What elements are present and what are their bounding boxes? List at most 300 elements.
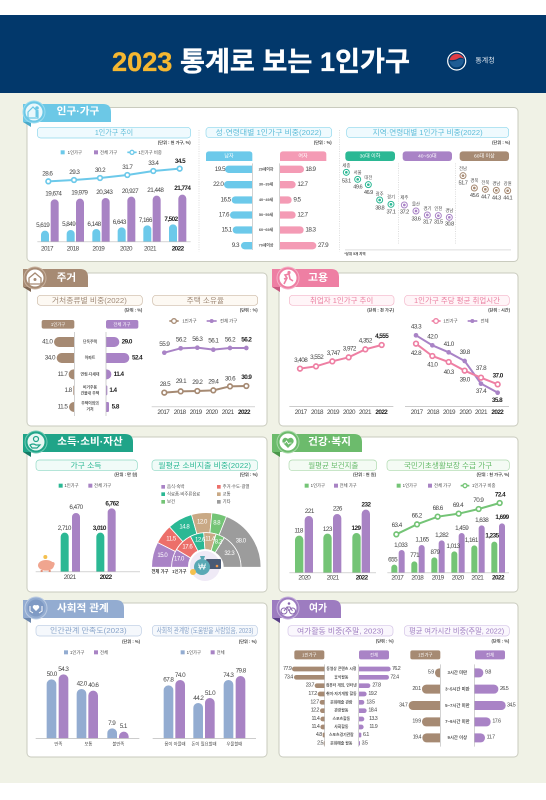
title: 2023 통계로 보는 1인가구 <box>112 47 410 77</box>
icon: piggy bank <box>38 555 55 572</box>
chart: 국민기초생활보장 수급 가구: 1,699 <box>495 514 510 521</box>
chart: 월평균 소비지출 비중: 주거·수도·광열 <box>223 483 249 490</box>
chart: 성·연령대별 1인가구 비중 <box>199 127 332 252</box>
chart: 인간관계 만족도: 7.9 <box>108 720 116 727</box>
chart: 1인가구 추이: 28.6 <box>42 170 53 177</box>
section tab: 인구·가구 <box>23 101 111 127</box>
chart: 사회적 관계망: 74.0 <box>175 672 186 679</box>
chart: 월평균 소비지출 비중: 교통 <box>223 491 231 496</box>
chart: 거처종류별 비중 <box>37 295 143 416</box>
chart: 성·연령대별 1인가구 비중: 남자 <box>224 152 234 159</box>
chart: 거처종류별 비중: 1.4 <box>109 387 118 394</box>
chart: 성·연령대별 1인가구 비중: 19.5 <box>215 166 226 173</box>
chart: 주택 소유율: 2017 <box>157 409 170 416</box>
chart: 여가활동 비중: 12.2 <box>311 708 320 714</box>
chart: 평균 여가시간 비중: 1인가구 <box>418 651 433 658</box>
chart: 가구 소득: 6,470 <box>69 504 84 511</box>
chart: 1인가구 주당 평균 취업시간: 39.0 <box>460 376 471 383</box>
chart: 여가활동 비중: 동영상 콘텐츠 시청 <box>326 666 357 671</box>
chart: 1인가구 추이: 2021 <box>144 245 157 252</box>
chart: 여가활동 비중: 77.9 <box>283 666 292 672</box>
chart: 월평균 보건지출: 2022 <box>356 574 369 581</box>
chart: 국민기초생활보장 수급 가구: 1,235 <box>485 532 500 539</box>
chart: 국민기초생활보장 수급 가구: 1,165 <box>415 536 430 543</box>
chart: 주택 소유율: 30.9 <box>241 374 252 381</box>
chart: 국민기초생활보장 수급 가구: 63.4 <box>392 522 403 529</box>
chart: 평균 여가시간 비중: 평균 여가시간 비중(주말, 2022) <box>409 626 504 635</box>
chart: 주택 소유율: 2022 <box>238 409 251 416</box>
section tab: 소득·소비·자산: 소득·소비·자산 <box>57 435 123 448</box>
chart: 월평균 보건지출: 2020 <box>298 574 311 581</box>
chart: 월평균 소비지출 비중: 15.0 <box>157 553 168 559</box>
chart: 사회적 관계망: 몸이 아플때 <box>164 740 186 747</box>
chart: 월평균 소비지출 비중: 기타 <box>223 498 231 505</box>
chart: 인간관계 만족도 <box>36 625 141 747</box>
chart: 평균 여가시간 비중: 5.9 <box>428 670 434 676</box>
chart: 성·연령대별 1인가구 비중: 22.0 <box>213 181 224 188</box>
chart: 주택 소유율: 56.3 <box>192 336 203 343</box>
chart: 평균 여가시간 비중: 34.5 <box>507 702 516 708</box>
chart: 취업자 1인가구 추이: (단위 : 천 가구) <box>367 306 395 312</box>
chart: 지역·연령대별 1인가구 비중: 경남 <box>492 180 500 186</box>
chart: 성·연령대별 1인가구 비중: 17.6 <box>219 211 230 218</box>
chart: 주택 소유율: 2018 <box>174 409 187 416</box>
chart: 평균 여가시간 비중: 전체 <box>486 651 494 658</box>
chart: 성·연령대별 1인가구 비중: 9.3 <box>232 242 240 249</box>
chart: 가구 소득: 가구 소득 <box>70 461 102 470</box>
chart: 국민기초생활보장 수급 가구: 2020 <box>452 574 465 581</box>
icon: statistics korea logo: 통계청 <box>475 56 495 64</box>
chart: 1인가구 주당 평균 취업시간: 42.8 <box>411 350 422 357</box>
chart: 여가활동 비중: 19.2 <box>368 691 377 697</box>
chart: 평균 여가시간 비중: 17.6 <box>492 719 501 725</box>
chart: 지역·연령대별 1인가구 비중: 30대 이하 <box>360 152 381 159</box>
chart: 월평균 보건지출: (단위 : 천 원) <box>353 471 377 477</box>
chart: 여가활동 비중: 스포츠활동 <box>333 716 351 721</box>
chart: 취업자 1인가구 추이: 3,972 <box>343 345 357 352</box>
panel: 고용 <box>272 267 518 426</box>
chart: 성·연령대별 1인가구 비중: 30~39세 <box>259 182 274 187</box>
chart: 주택 소유율: (단위 : %) <box>240 306 258 312</box>
chart: 가구 소득 <box>36 460 140 581</box>
chart: 인간관계 만족도: 5.1 <box>120 723 128 730</box>
chart: 인간관계 만족도: 불만족 <box>112 740 124 747</box>
chart: 1인가구 주당 평균 취업시간: 2020 <box>459 409 472 416</box>
chart: 인간관계 만족도: 만족 <box>54 740 62 747</box>
chart: 월평균 소비지출 비중: 보건 <box>167 498 175 504</box>
chart: 가구 소득: 2022 <box>100 574 113 581</box>
chart: 가구 소득: 전체 가구 <box>94 482 111 489</box>
chart: 취업자 1인가구 추이: 2019 <box>327 409 340 416</box>
section tab: 사회적 관계: 사회적 관계 <box>57 602 109 614</box>
chart: 평균 여가시간 비중: 3시간 미만 <box>448 669 467 676</box>
chart: 여가활동 비중: 23.7 <box>306 683 315 689</box>
chart: 여가활동 비중: 11.4 <box>311 724 320 730</box>
chart: 지역·연령대별 1인가구 비중: 전남 <box>459 165 467 171</box>
chart: 가구 소득: 1인가구 <box>64 482 79 489</box>
chart: 지역·연령대별 1인가구 비중: 60대 이상 <box>474 152 495 159</box>
panel: 사회적 관계 <box>23 597 267 757</box>
chart: 성·연령대별 1인가구 비중: 70세이상 <box>259 243 274 248</box>
chart: 월평균 소비지출 비중: 음식·숙박 <box>167 483 184 490</box>
chart: 성·연령대별 1인가구 비중: 27.9 <box>318 242 329 249</box>
chart: 월평균 보건지출: 129 <box>352 525 361 532</box>
chart: 국민기초생활보장 수급 가구: 70.9 <box>473 497 484 504</box>
chart: 평균 여가시간 비중: 5~7시간 미만 <box>445 702 470 709</box>
chart: 성·연령대별 1인가구 비중: 12.7 <box>297 211 309 218</box>
chart: 성·연령대별 1인가구 비중: 60~69세 <box>259 227 274 232</box>
chart: 거처종류별 비중: 34.0 <box>45 354 56 361</box>
chart: 인간관계 만족도: 전체 <box>100 649 108 656</box>
chart: 월평균 소비지출 비중: 14.8 <box>179 524 190 530</box>
chart: 국민기초생활보장 수급 가구: 1,638 <box>475 517 489 524</box>
chart: 지역·연령대별 1인가구 비중: 30.8 <box>445 221 454 227</box>
chart: 여가활동 비중: 12.7 <box>310 699 319 705</box>
chart: 1인가구 추이: 30.2 <box>95 167 106 174</box>
chart: 평균 여가시간 비중: 3~5시간 미만 <box>445 685 470 692</box>
chart: 지역·연령대별 1인가구 비중: 전북 <box>481 179 489 186</box>
chart: 월평균 소비지출 비중: 38.0 <box>236 538 247 544</box>
chart: 월평균 보건지출: 월평균 보건지출 <box>308 461 359 470</box>
chart: 주택 소유율: 28.5 <box>160 381 171 388</box>
chart: 지역·연령대별 1인가구 비중: 광주 <box>376 190 384 197</box>
chart: 1인가구 주당 평균 취업시간: 2022 <box>491 409 504 416</box>
chart: 여가활동 비중: 73.4 <box>284 674 293 680</box>
chart: 주택 소유율: 29.2 <box>192 379 203 386</box>
chart: 지역·연령대별 1인가구 비중: 울산 <box>412 200 420 206</box>
chart: 1인가구 주당 평균 취업시간 <box>405 295 511 416</box>
chart: 주택 소유율 <box>152 295 258 416</box>
icon: money bag and card: ₩ <box>198 562 206 572</box>
section tab: 고용: 고용 <box>308 272 328 284</box>
chart: 여가활동 비중: 2.5 <box>317 740 324 746</box>
chart: 평균 여가시간 비중 <box>399 626 516 748</box>
chart: 월평균 보건지출: 221 <box>305 508 315 515</box>
chart: 성·연령대별 1인가구 비중: 15.1 <box>221 226 233 233</box>
chart: 1인가구 추이: 2017 <box>41 245 54 252</box>
section tab: 여가: 여가 <box>309 602 327 614</box>
chart: 지역·연령대별 1인가구 비중: 경기 <box>423 205 431 212</box>
chart: 여가활동 비중: 72.4 <box>390 674 399 680</box>
chart: 월평균 보건지출: 226 <box>333 505 343 512</box>
chart: 여가활동 비중: 27.8 <box>372 683 381 689</box>
chart: 주택 소유율: 56.1 <box>208 337 219 344</box>
chart: 국민기초생활보장 수급 가구: 1,161 <box>465 537 479 544</box>
chart: 1인가구 추이: 29.3 <box>69 169 80 176</box>
section tab: 주거: 주거 <box>57 271 76 284</box>
section tab: 건강·복지: 건강·복지 <box>308 436 351 448</box>
chart: 국민기초생활보장 수급 가구: 2018 <box>411 574 424 581</box>
chart: 인간관계 만족도: 보통 <box>84 741 92 746</box>
chart: 성·연령대별 1인가구 비중: 29세이하 <box>259 166 274 171</box>
chart: 지역·연령대별 1인가구 비중: 44.7 <box>481 195 490 201</box>
chart: 성·연령대별 1인가구 비중: 12.7 <box>297 181 309 188</box>
chart: 월평균 소비지출 비중: 8.2 <box>215 539 223 545</box>
chart: 국민기초생활보장 수급 가구: 국민기초생활보장 수급 가구 <box>404 461 492 470</box>
chart: 1인가구 주당 평균 취업시간: 37.8 <box>476 365 487 372</box>
chart: 지역·연령대별 1인가구 비중 <box>339 127 512 256</box>
chart: 거처종류별 비중: 전체 가구 <box>113 321 131 328</box>
chart: 국민기초생활보장 수급 가구: 2017 <box>391 574 404 581</box>
section tab: 소득·소비·자산 <box>23 431 133 457</box>
chart: 취업자 1인가구 추이: 3,552 <box>310 354 324 361</box>
chart: 주택 소유율: 전체 가구 <box>220 317 237 324</box>
chart: 사회적 관계망: 44.2 <box>193 695 204 702</box>
chart: 1인가구 주당 평균 취업시간: 39.8 <box>460 349 471 356</box>
chart: 거처종류별 비중: 41.0 <box>42 338 53 345</box>
chart: 1인가구 추이: 31.7 <box>122 164 133 171</box>
chart: 지역·연령대별 1인가구 비중: 경북 <box>470 177 478 184</box>
chart: 여가활동 비중: 사회활동 <box>334 724 349 729</box>
chart: 거처종류별 비중: 1.8 <box>64 387 73 394</box>
chart: 거처종류별 비중: (단위 : %) <box>125 306 143 312</box>
chart: 여가활동 비중: (단위 : %) <box>376 637 394 643</box>
chart: 지역·연령대별 1인가구 비중: 31.5 <box>434 220 443 226</box>
chart: 거처종류별 비중: 11.5 <box>58 403 68 410</box>
chart: 지역·연령대별 1인가구 비중: 38.8 <box>375 205 384 211</box>
chart: 월평균 소비지출 비중 <box>151 460 261 583</box>
panel: 여가 <box>272 597 518 757</box>
chart: 거처종류별 비중: 거처종류별 비중(2022) <box>52 296 127 305</box>
chart: 1인가구 추이: (단위 : 천 가구, %) <box>158 139 191 145</box>
chart: 국민기초생활보장 수급 가구: 879 <box>431 549 440 556</box>
chart: 월평균 소비지출 비중: 식료품·비주류음료 <box>167 490 200 497</box>
chart: 지역·연령대별 1인가구 비중: 경남 <box>445 207 453 213</box>
chart: 월평균 소비지출 비중: 17.6 <box>182 544 193 550</box>
chart: 주택 소유율: 29.4 <box>208 378 219 385</box>
panel: 건강·복지 <box>272 431 518 592</box>
chart: 인간관계 만족도: 1인가구 <box>70 649 84 656</box>
chart: 여가활동 비중: 11.9 <box>369 724 378 730</box>
chart: 지역·연령대별 1인가구 비중: 인천 <box>434 205 442 211</box>
chart: 취업자 1인가구 추이: 3,408 <box>294 357 308 364</box>
chart: 지역·연령대별 1인가구 비중: 대전 <box>364 174 372 181</box>
chart: 평균 여가시간 비중: 19.4 <box>413 735 422 741</box>
chart: 취업자 1인가구 추이: 2017 <box>295 409 308 416</box>
chart: 국민기초생활보장 수급 가구: 72.4 <box>495 491 506 498</box>
chart: 1인가구 추이: 2020 <box>120 245 133 252</box>
chart: 성·연령대별 1인가구 비중: (단위 : %) <box>314 139 332 145</box>
chart: 주택 소유율: 55.9 <box>159 341 170 348</box>
chart: 지역·연령대별 1인가구 비중: (단위 : %) <box>492 139 511 145</box>
chart: 국민기초생활보장 수급 가구: 1인가구 비중 <box>472 482 496 489</box>
chart: 평균 여가시간 비중: 20.1 <box>412 686 421 692</box>
chart: 국민기초생활보장 수급 가구: 1인가구 <box>403 482 417 489</box>
chart: 월평균 소비지출 비중: 12.0 <box>197 519 208 525</box>
chart: 1인가구 주당 평균 취업시간: 37.0 <box>493 372 504 379</box>
chart: 가구 소득: (단위 : 만 원) <box>114 471 138 477</box>
chart: 1인가구 추이: 2018 <box>67 245 80 252</box>
chart: 월평균 보건지출: 123 <box>323 526 333 533</box>
chart: 거처종류별 비중: 단독주택 <box>83 339 98 344</box>
chart: 사회적 관계망: 51.0 <box>205 690 216 697</box>
chart: 사회적 관계망: 전체 <box>217 649 225 656</box>
chart: 국민기초생활보장 수급 가구: 1,013 <box>446 543 461 550</box>
chart: 여가활동 비중: 취미·자기개발 활동 <box>326 691 357 696</box>
chart: 성·연령대별 1인가구 비중: 18.3 <box>305 226 317 233</box>
chart: 1인가구 추이: 전체 가구 <box>100 149 117 156</box>
chart: 1인가구 주당 평균 취업시간: 2021 <box>475 409 488 416</box>
chart: 여가활동 비중: 스포츠경기관람 <box>329 732 354 737</box>
chart: 지역·연령대별 1인가구 비중: 53.1 <box>342 179 351 185</box>
chart: 지역·연령대별 1인가구 비중: 지역·연령대별 1인가구 비중(2022) <box>373 128 483 137</box>
chart: 1인가구 추이: 2022 <box>172 245 185 252</box>
chart: 여가활동 비중: 13.3 <box>369 716 378 722</box>
chart: 사회적 관계망 <box>152 625 257 747</box>
chart: 주택 소유율: 56.2 <box>241 336 252 343</box>
chart: 국민기초생활보장 수급 가구: 2019 <box>432 574 445 581</box>
chart: 거처종류별 비중: 11.4 <box>114 371 125 378</box>
chart: 1인가구 주당 평균 취업시간: 43.3 <box>411 323 422 330</box>
chart: 지역·연령대별 1인가구 비중: 49.6 <box>353 185 362 191</box>
chart: 지역·연령대별 1인가구 비중: 경기 <box>387 193 395 200</box>
chart: 1인가구 추이: 5,619 <box>36 222 50 229</box>
chart: 여가활동 비중: 휴식활동 <box>334 674 349 679</box>
chart: 사회적 관계망: 돈이 필요할때 <box>191 740 217 747</box>
chart: 가구 소득: 6,762 <box>105 500 120 507</box>
chart: 인간관계 만족도: (단위 : %) <box>122 638 141 644</box>
chart: 여가활동 비중: 문화예술 활동 <box>330 740 353 745</box>
chart: 1인가구 추이: 20,343 <box>96 189 113 196</box>
chart: 1인가구 추이: 1인가구 비중 <box>138 149 162 156</box>
chart: 취업자 1인가구 추이 <box>289 295 395 416</box>
chart: 취업자 1인가구 추이: 취업자 1인가구 추이 <box>310 296 373 305</box>
chart: 1인가구 추이: 21,448 <box>147 187 164 194</box>
chart: 지역·연령대별 1인가구 비중: 33.6 <box>412 216 421 222</box>
section tab: 건강·복지 <box>272 431 362 457</box>
chart: 1인가구 추이: 2019 <box>92 245 105 252</box>
chart: 성·연령대별 1인가구 비중: 여자 <box>298 152 308 159</box>
chart: 평균 여가시간 비중: 9시간 이상 <box>448 734 467 741</box>
chart: 사회적 관계망: (단위 : %) <box>239 638 257 644</box>
chart: 월평균 보건지출: 1인가구 <box>311 482 325 489</box>
chart: 사회적 관계망: 1인가구 <box>187 649 201 656</box>
chart: 인간관계 만족도: 인간관계 만족도(2023) <box>50 626 127 635</box>
chart: 국민기초생활보장 수급 가구: 68.6 <box>433 505 444 512</box>
chart: 거처종류별 비중: 건물내 주택 <box>81 390 100 395</box>
chart: 주택 소유율: 29.1 <box>176 378 187 385</box>
chart: 지역·연령대별 1인가구 비중: 44.3 <box>492 195 501 201</box>
chart: 국민기초생활보장 수급 가구: 655 <box>388 556 398 563</box>
chart: 거처종류별 비중: 비거주용 <box>83 384 98 389</box>
chart: 1인가구 주당 평균 취업시간: 전체 <box>481 317 489 324</box>
chart: 취업자 1인가구 추이: 2018 <box>311 409 324 416</box>
chart: 거처종류별 비중: 거처 <box>86 407 94 412</box>
chart: 지역·연령대별 1인가구 비중: 세종 <box>342 162 350 169</box>
chart: 주택 소유율: 56.2 <box>225 336 236 343</box>
chart: 국민기초생활보장 수급 가구: (단위 : 천 가구, %) <box>477 471 510 477</box>
chart: 여가활동 비중: 여가활동 비중(주말, 2023) <box>297 626 384 635</box>
chart: 지역·연령대별 1인가구 비중: 37.1 <box>387 209 396 215</box>
chart: 1인가구 주당 평균 취업시간: 41.0 <box>427 361 438 368</box>
chart: 1인가구 추이: 6,148 <box>87 221 102 228</box>
chart: 성·연령대별 1인가구 비중: 성·연령대별 1인가구 비중(2022) <box>216 128 322 137</box>
chart: 주택 소유율: 2020 <box>206 409 219 416</box>
chart: 1인가구 추이: 6,643 <box>113 219 127 226</box>
chart: 성·연령대별 1인가구 비중: 16.5 <box>220 196 232 203</box>
chart: 국민기초생활보장 수급 가구: 2021 <box>471 574 484 581</box>
chart: 여가활동 비중 <box>283 626 401 748</box>
chart: 국민기초생활보장 수급 가구 <box>387 460 510 581</box>
chart: 여가활동 비중: 4.8 <box>316 732 322 738</box>
chart: 사회적 관계망: 우울할때 <box>226 740 242 747</box>
chart: 취업자 1인가구 추이: 4,555 <box>375 333 389 340</box>
chart: 국민기초생활보장 수급 가구: 66.2 <box>412 512 423 519</box>
chart: 여가활동 비중: 18.4 <box>368 708 377 714</box>
chart: 가구 소득: 2021 <box>64 574 77 581</box>
chart: 여가활동 비중: 13.5 <box>366 699 375 705</box>
chart: 사회적 관계망: 79.8 <box>236 667 247 674</box>
chart: 주택 소유율: 2019 <box>190 409 203 416</box>
chart: 거처종류별 비중: 52.4 <box>132 354 143 361</box>
chart: 지역·연령대별 1인가구 비중: 46.9 <box>364 190 373 196</box>
chart: 여가활동 비중: 컴퓨터 게임, 인터넷 <box>326 683 357 688</box>
chart: 여가활동 비중: 문화예술 관람 <box>330 699 353 704</box>
chart: 여가활동 비중: 11.4 <box>311 716 320 722</box>
chart: 국민기초생활보장 수급 가구: 1,033 <box>394 542 408 549</box>
chart: 1인가구 추이: 19,979 <box>71 189 88 196</box>
chart: 지역·연령대별 1인가구 비중: *상위 5개 지역 <box>344 251 366 256</box>
chart: 월평균 소비지출 비중: 32.3 <box>224 551 235 557</box>
icon: statistics korea logo <box>448 52 495 70</box>
chart: 1인가구 주당 평균 취업시간: 1인가구 주당 평균 취업시간 <box>414 296 500 305</box>
chart: 월평균 소비지출 비중: 11.5 <box>166 536 177 542</box>
chart: 1인가구 주당 평균 취업시간: 1인가구 <box>443 317 458 324</box>
chart: 거처종류별 비중: 주택이외의 <box>81 401 99 406</box>
chart: 취업자 1인가구 추이: 2020 <box>343 409 356 416</box>
chart: 평균 여가시간 비중: 9.8 <box>485 670 491 676</box>
chart: 월평균 소비지출 비중: 전체 가구 <box>151 568 169 575</box>
chart: 거처종류별 비중: 11.7 <box>58 371 68 378</box>
chart: 주택 소유율: 1인가구 <box>182 317 197 324</box>
chart: 1인가구 주당 평균 취업시간: 2019 <box>443 409 456 416</box>
chart: 지역·연령대별 1인가구 비중: 37.2 <box>400 209 409 215</box>
chart: 인간관계 만족도: 54.3 <box>58 666 69 673</box>
chart: 평균 여가시간 비중: 26.5 <box>500 686 509 692</box>
chart: 국민기초생활보장 수급 가구: 69.4 <box>453 502 464 509</box>
chart: 월평균 소비지출 비중: 17.0 <box>174 556 185 562</box>
chart: 여가활동 비중: 3.5 <box>362 740 368 746</box>
chart: 1인가구 추이: 21,774 <box>174 185 191 192</box>
chart: 월평균 보건지출: 232 <box>362 501 371 508</box>
chart: 월평균 보건지출: 118 <box>294 527 304 534</box>
chart: 평균 여가시간 비중: 19.9 <box>412 719 421 725</box>
chart: 평균 여가시간 비중: 34.7 <box>399 702 408 708</box>
chart: 취업자 1인가구 추이: 3,747 <box>327 350 341 357</box>
chart: 평균 여가시간 비중: 7~9시간 미만 <box>445 718 470 725</box>
chart: 성·연령대별 1인가구 비중: 18.9 <box>305 166 317 173</box>
chart: 주택 소유율: 주택 소유율 <box>187 296 224 305</box>
chart: 지역·연령대별 1인가구 비중: 제주 <box>400 194 408 201</box>
chart: 거처종류별 비중: 아파트 <box>85 355 96 360</box>
section tab: 고용 <box>272 267 339 292</box>
chart: 1인가구 주당 평균 취업시간: 35.8 <box>492 397 503 404</box>
chart: 월평균 소비지출 비중: 8.8 <box>213 520 221 526</box>
chart: 여가활동 비중: 전체 <box>370 651 378 658</box>
chart: 가구 소득: 2,710 <box>58 525 72 532</box>
chart: 1인가구 추이 <box>36 127 191 252</box>
chart: 지역·연령대별 1인가구 비중: 40~50대 <box>418 152 437 159</box>
chart: 거처종류별 비중: 29.0 <box>122 338 133 345</box>
chart: 지역·연령대별 1인가구 비중: 45.6 <box>470 193 479 199</box>
chart: 여가활동 비중: 76.2 <box>392 666 401 672</box>
chart: 여가활동 비중: 6.1 <box>363 732 369 738</box>
chart: 사회적 관계망: 74.3 <box>223 672 234 679</box>
chart: 1인가구 추이: 20,927 <box>122 188 139 195</box>
chart: 월평균 소비지출 비중: 월평균 소비지출 비중(2022) <box>158 461 251 470</box>
chart: 1인가구 추이: 19,674 <box>45 190 62 197</box>
chart: 1인가구 추이: 1인가구 추이 <box>95 128 133 137</box>
